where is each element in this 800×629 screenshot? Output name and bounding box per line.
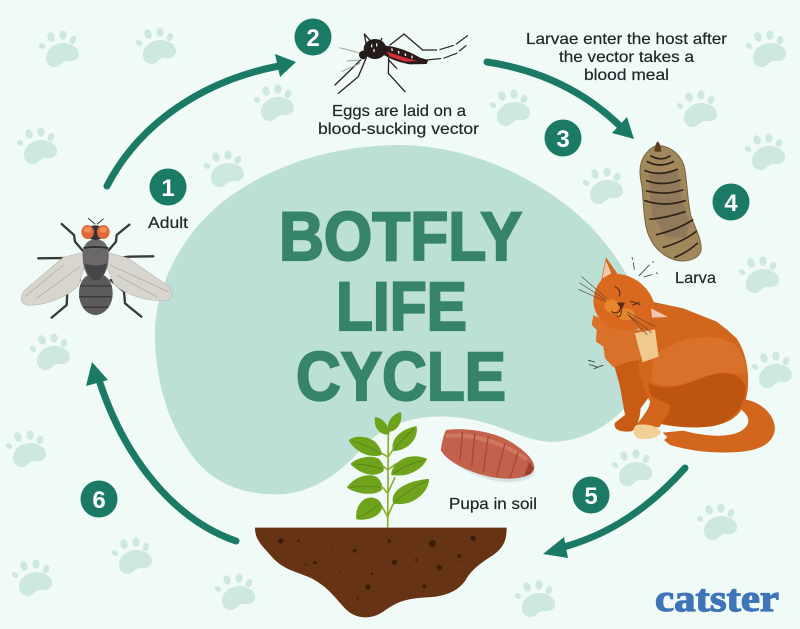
fly legs <box>38 218 153 318</box>
arrow: cat to pupa <box>543 468 685 558</box>
cat chest fur <box>592 315 652 367</box>
title <box>279 198 522 415</box>
label: larvae enter host: the vector takes a <box>559 49 694 66</box>
cat raised paw <box>635 329 659 362</box>
label: larvae enter host <box>526 31 728 84</box>
cat far leg <box>608 337 652 432</box>
step 1 badge <box>150 168 186 206</box>
label: larvae enter host: Larvae enter the host after <box>526 31 728 48</box>
cat belly shade <box>648 373 746 427</box>
step 5 badge: 5 <box>584 483 598 510</box>
label: eggs: Eggs are laid on a <box>332 103 466 120</box>
fly head and eyes <box>85 225 105 240</box>
central blob <box>155 145 646 494</box>
step 2 badge: 2 <box>306 25 320 52</box>
cat muzzle <box>604 299 619 313</box>
logo: catster: catster <box>655 578 779 620</box>
label: eggs <box>318 103 480 138</box>
icon: adult fly <box>21 218 172 318</box>
icon: mosquito <box>335 34 468 93</box>
fly abdomen <box>79 273 113 315</box>
step 1 badge: 1 <box>161 175 175 202</box>
arrow: soil to adult <box>86 362 236 541</box>
icon: larva <box>640 142 701 261</box>
soil specks <box>278 536 476 600</box>
step 6 badge <box>80 480 118 518</box>
cat near leg <box>635 362 670 427</box>
step 3 badge <box>544 120 582 156</box>
label: adult: Adult <box>148 215 189 232</box>
pupa shadow <box>442 447 535 482</box>
mosquito thorax and head <box>364 39 386 59</box>
mosquito wing <box>339 48 362 72</box>
label: larvae enter host: blood meal <box>584 67 669 84</box>
label: pupa in soil: Pupa in soil <box>449 496 537 513</box>
step 6 badge: 6 <box>92 487 106 514</box>
larva segments <box>645 156 697 257</box>
title: BOTFLY <box>279 198 522 275</box>
label: eggs: blood-sucking vector <box>318 121 480 138</box>
step 3 badge: 3 <box>556 126 570 153</box>
icon: scratching cat <box>578 257 775 453</box>
plant leaf veins <box>350 428 427 517</box>
mosquito legs <box>335 34 468 93</box>
fly thorax <box>83 239 109 281</box>
scratch marks <box>588 257 657 369</box>
cat body <box>633 302 748 428</box>
icon: soil mound <box>255 528 507 617</box>
mosquito abdomen <box>382 46 428 64</box>
fly wings <box>21 253 85 305</box>
cat ears <box>601 257 618 283</box>
larva tip <box>654 142 661 152</box>
plant leaves <box>348 413 428 519</box>
title: CYCLE <box>296 338 506 415</box>
larva shading <box>649 172 690 238</box>
step 2 badge <box>294 18 332 56</box>
arrow: vector to larva <box>487 62 634 139</box>
cat paw <box>633 425 661 439</box>
step 4 badge <box>712 184 750 220</box>
cat back light <box>652 337 747 386</box>
cat face <box>617 303 625 309</box>
cat whiskers <box>578 277 655 335</box>
icon: pupa <box>442 430 535 482</box>
cat tail <box>663 399 775 453</box>
label: larva: Larva <box>675 270 716 287</box>
icon: plant <box>348 413 428 528</box>
larva body <box>640 145 701 261</box>
step 4 badge: 4 <box>724 190 738 217</box>
plant stem <box>375 430 397 528</box>
title: LIFE <box>336 268 467 345</box>
cat head <box>593 274 655 331</box>
step 5 badge <box>572 476 610 514</box>
arrow: adult to vector <box>107 54 296 186</box>
pupa body <box>442 430 533 478</box>
